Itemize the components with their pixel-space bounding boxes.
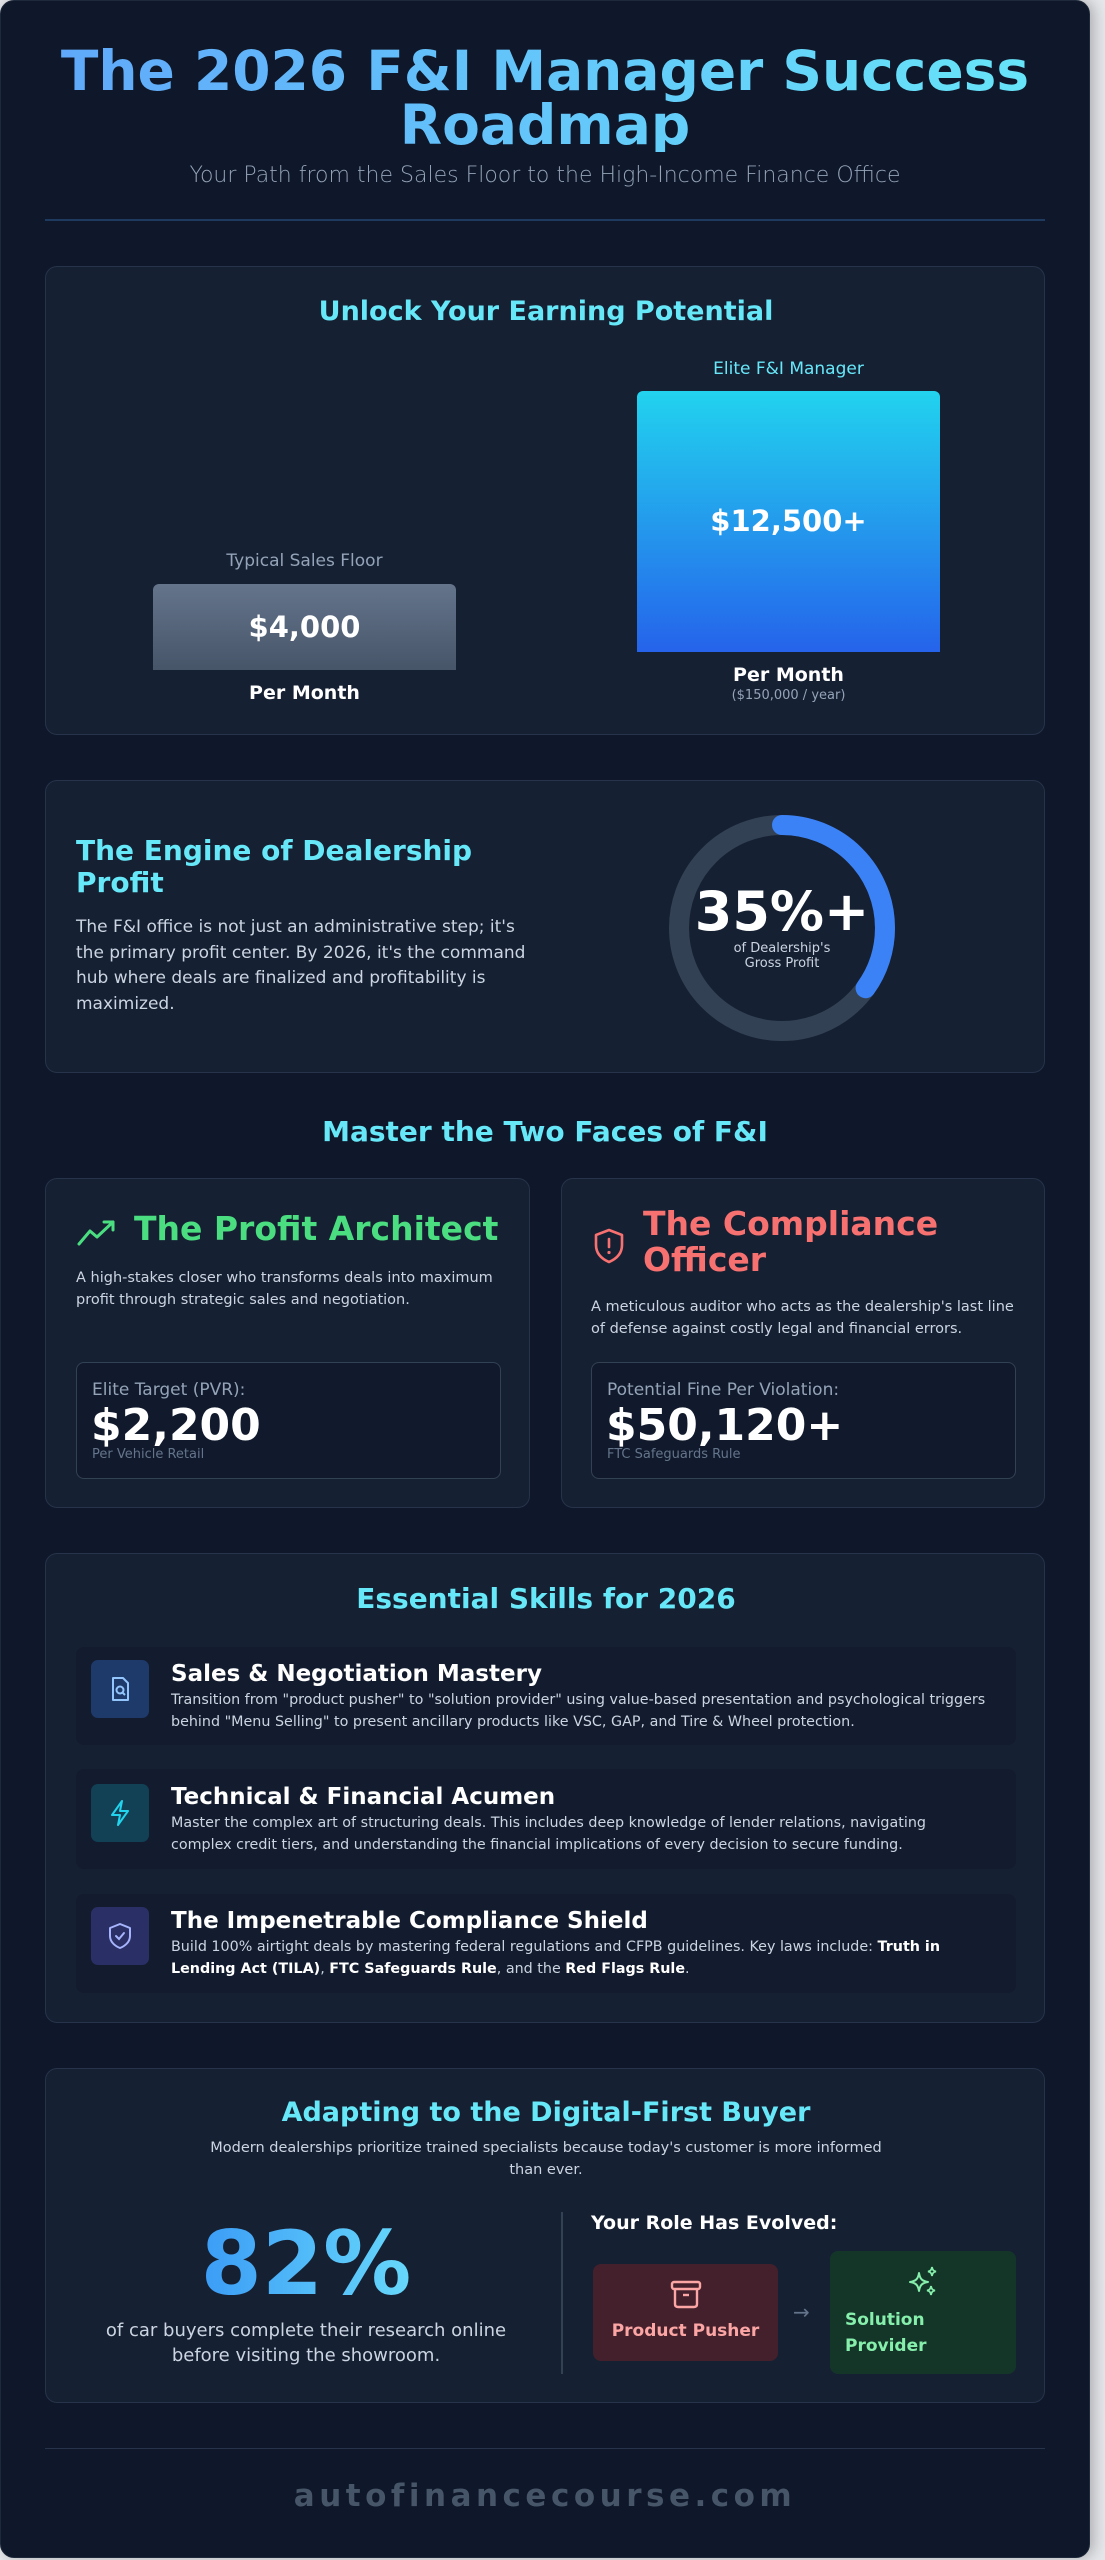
box: solution provider xyxy=(830,2251,1016,2374)
box: product pusher: Product Pusher xyxy=(612,2321,759,2341)
panel: digital-first buyer xyxy=(45,2068,1045,2403)
text: compliance description: A meticulous auditor who acts as the dealership's last line of defense against costly legal and financial errors. xyxy=(591,1299,1014,1337)
box: product pusher xyxy=(593,2264,778,2361)
icon: shield check xyxy=(91,1907,149,1965)
skill row: compliance: The Impenetrable Compliance Shield xyxy=(171,1908,648,1934)
bar: typical sales floor: $4,000 xyxy=(249,610,360,644)
title: The 2026 F&I Manager Success xyxy=(61,39,1029,103)
box: solution provider: Solution xyxy=(845,2310,925,2330)
arrow: → xyxy=(793,2300,810,2324)
text: architect description: A high-stakes closer who transforms deals into maximum profit through strategic sales and negotiation. xyxy=(76,1270,493,1308)
panel: essential skills xyxy=(45,1553,1045,2023)
panel: earning potential xyxy=(45,266,1045,735)
stat: 82%: before visiting the showroom. xyxy=(172,2345,440,2366)
stat: fine per violation: Potential Fine Per Violation: xyxy=(607,1380,839,1400)
skill row: technical: Technical & Financial Acumen xyxy=(171,1784,555,1810)
bar: elite manager: Per Month xyxy=(733,664,844,686)
chart: donut 35% xyxy=(669,815,895,1041)
bar: elite manager xyxy=(637,359,940,703)
box: solution provider: Provider xyxy=(845,2336,927,2356)
skill row: technical xyxy=(76,1769,1016,1869)
text: engine description: The F&I office is not just an administrative step; it's the primary profit center. By 2026, it's the command hub where deals are finalized and profitability is maximized. xyxy=(76,917,525,1014)
text: digital intro: Modern dealerships prioritize trained specialists because today's customer is more informed than ever. xyxy=(210,2140,882,2178)
bar: elite manager: ($150,000 / year) xyxy=(732,688,845,703)
heading: engine: The Engine of Dealership xyxy=(76,834,472,867)
chart: donut 35%: Gross Profit xyxy=(745,956,819,971)
panel: compliance officer xyxy=(561,1178,1045,1508)
stat: PVR target xyxy=(76,1362,501,1479)
heading: engine xyxy=(76,834,472,899)
bar: typical sales floor xyxy=(153,551,456,704)
heading: profit architect: The Profit Architect xyxy=(134,1209,498,1248)
stat: fine per violation xyxy=(591,1362,1016,1479)
footer: website: autofinancecourse.com xyxy=(294,2478,796,2514)
heading: engine: Profit xyxy=(76,866,164,899)
skill row: compliance xyxy=(76,1894,1016,1993)
stat: 82% xyxy=(106,2212,506,2366)
stat: fine per violation: FTC Safeguards Rule xyxy=(607,1447,740,1462)
panel: engine of profit xyxy=(45,780,1045,1073)
stat: PVR target: Per Vehicle Retail xyxy=(92,1447,204,1462)
panel: profit architect xyxy=(45,1178,530,1508)
bar: typical sales floor: Typical Sales Floor xyxy=(226,551,383,571)
title xyxy=(0,44,1090,152)
icon: shield alert xyxy=(594,1228,624,1264)
heading: earning: Unlock Your Earning Potential xyxy=(319,296,773,327)
stat: PVR target: $2,200 xyxy=(91,1400,261,1451)
heading: compliance officer: The Compliance xyxy=(643,1204,938,1243)
skill row: compliance: Build 100% airtight deals by mastering federal regulations and CFPB guidelines. Key laws include: Truth in Lending Act (TILA), FTC Safeguards Rule, and the Red Flags Rule. xyxy=(171,1939,940,1977)
heading: skills: Essential Skills for 2026 xyxy=(356,1582,736,1615)
heading: digital: Adapting to the Digital-First Buyer xyxy=(282,2097,810,2128)
skill row: sales: Transition from "product pusher" to "solution provider" using value-based presentation and psychological triggers behind "Menu Selling" to present ancillary products like VSC, GAP, and Tire & Wheel protection. xyxy=(171,1692,985,1730)
heading: compliance officer xyxy=(643,1204,938,1279)
icon: trending up xyxy=(77,1220,115,1246)
bar: elite manager: $12,500+ xyxy=(710,504,867,538)
title: Roadmap xyxy=(400,93,690,157)
stat: 82%: 82% xyxy=(201,2212,411,2315)
skill row: sales: Sales & Negotiation Mastery xyxy=(171,1661,542,1687)
icon: document search xyxy=(91,1660,149,1718)
stat: PVR target: Elite Target (PVR): xyxy=(92,1380,245,1400)
chart: donut 35%: 35%+ xyxy=(695,880,869,943)
skill row: sales xyxy=(76,1647,1016,1745)
stat: 82%: of car buyers complete their research online xyxy=(106,2320,506,2341)
heading: two faces: Master the Two Faces of F&I xyxy=(322,1115,768,1148)
stat: fine per violation: $50,120+ xyxy=(606,1400,843,1451)
chart: donut 35%: of Dealership's xyxy=(734,941,830,956)
subtitle: Your Path from the Sales Floor to the High-Income Finance Office xyxy=(189,163,901,188)
bar: typical sales floor: Per Month xyxy=(249,682,360,704)
heading: role evolved: Your Role Has Evolved: xyxy=(591,2212,837,2234)
icon: lightning xyxy=(91,1784,149,1842)
skill row: technical: Master the complex art of structuring deals. This includes deep knowledge of lender relations, navigating complex credit tiers, and understanding the financial implications of every decision to secure funding. xyxy=(171,1815,926,1853)
bar: elite manager: Elite F&I Manager xyxy=(713,359,864,379)
heading: compliance officer: Officer xyxy=(643,1240,766,1279)
